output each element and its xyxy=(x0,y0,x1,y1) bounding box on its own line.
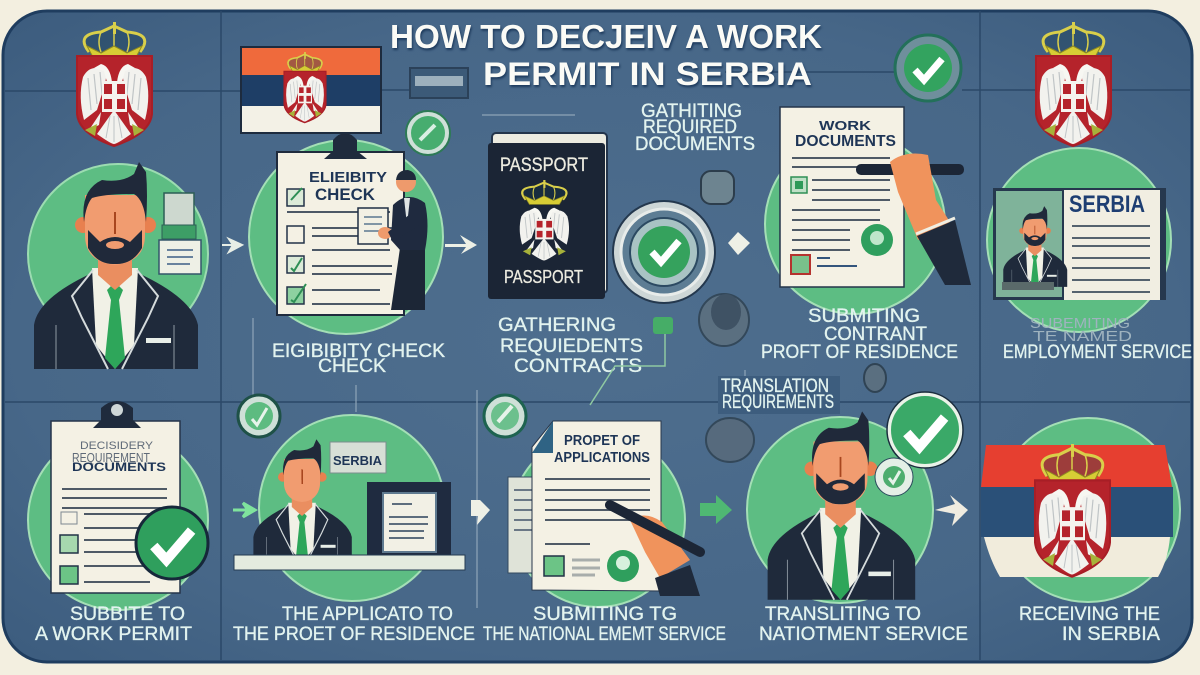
panel: step 1 applicant xyxy=(28,22,208,369)
sign xyxy=(330,442,386,473)
requirements heading: REQUIREMENTS xyxy=(722,392,834,413)
caption xyxy=(759,604,968,645)
panel: step 4 work documents xyxy=(761,35,971,363)
passport: PASSPORT xyxy=(504,267,583,287)
arrow xyxy=(700,495,732,524)
document xyxy=(780,107,904,287)
check badge xyxy=(484,395,526,437)
clipboard: DOCUMENTS xyxy=(72,460,166,474)
flag xyxy=(981,444,1173,577)
figure: applicant xyxy=(34,162,198,369)
figure: translator xyxy=(768,411,915,600)
caption xyxy=(233,604,475,645)
caption: SUBBITE TO xyxy=(70,604,185,625)
green circle xyxy=(996,418,1180,602)
check badge xyxy=(887,392,963,468)
caption: THE NATIONAL EMEMT SERVICE xyxy=(483,624,726,645)
passport: PASSPORT xyxy=(500,155,588,176)
green circle xyxy=(511,433,685,607)
requirements heading xyxy=(718,376,840,414)
check badge xyxy=(895,35,961,101)
green circle xyxy=(987,148,1171,332)
panel: step 5 employment service xyxy=(987,22,1192,363)
caption: A WORK PERMIT xyxy=(35,624,192,645)
panel: step 8 applications xyxy=(483,395,726,645)
id card: SERBIA xyxy=(1069,191,1145,218)
caption: SUBMITING TG xyxy=(533,604,677,625)
check badge xyxy=(406,111,450,155)
green circle xyxy=(259,415,445,601)
arrow xyxy=(445,235,477,254)
title xyxy=(390,18,822,92)
document xyxy=(508,421,661,591)
title: PERMIT IN SERBIA xyxy=(483,56,812,92)
green circle xyxy=(28,164,208,344)
arrow xyxy=(935,495,968,526)
clipboard: REQUIREMENT xyxy=(72,450,150,465)
caption xyxy=(498,315,643,377)
caption: SUBMITING xyxy=(808,306,920,327)
figure: small businessman xyxy=(358,170,428,310)
figure: clerk xyxy=(253,439,352,563)
caption: TE NAMED xyxy=(1033,328,1132,345)
panel: step 2 eligibility check xyxy=(241,47,468,377)
icon: coat of arms xyxy=(77,22,152,146)
green circle xyxy=(765,134,945,314)
caption: GATHERING xyxy=(498,315,616,336)
caption: CONTRACTS xyxy=(514,356,642,377)
panel: step 9 translation xyxy=(706,364,968,645)
caption xyxy=(761,306,958,363)
icon: hand with pen xyxy=(610,505,700,596)
title: HOW TO DECJEIV A WORK xyxy=(390,18,822,55)
caption: CHECK xyxy=(318,356,386,377)
document: DOCUMENTS xyxy=(795,133,896,150)
label plate xyxy=(410,68,468,98)
green circle xyxy=(747,417,933,603)
green circle xyxy=(249,140,443,334)
requirements heading: REQUIRED xyxy=(643,117,737,138)
icon: hand with pen xyxy=(856,154,971,285)
caption: PROFT OF RESIDENCE xyxy=(761,342,958,363)
caption xyxy=(1003,315,1192,363)
monitor xyxy=(367,482,451,556)
caption xyxy=(272,341,445,377)
requirements heading: TRANSLATION xyxy=(721,376,829,397)
arrow xyxy=(222,239,242,252)
requirements heading: GATHITING xyxy=(641,101,742,122)
stamp xyxy=(699,294,749,346)
requirements heading xyxy=(635,101,755,155)
caption: EIGIBIBITY CHECK xyxy=(272,341,445,362)
clipboard: CHECK xyxy=(315,185,376,204)
icon: printer xyxy=(159,193,201,274)
clipboard: DECISIDERY xyxy=(80,440,154,452)
passport xyxy=(488,133,607,299)
id card xyxy=(993,188,1166,300)
caption xyxy=(483,604,726,645)
check seal xyxy=(613,201,715,303)
flag xyxy=(241,47,381,133)
stamp xyxy=(706,418,754,462)
counter xyxy=(234,555,465,570)
caption: TRANSLITING TO xyxy=(765,604,921,625)
caption: CONTRANT xyxy=(824,324,927,345)
clipboard xyxy=(51,401,180,593)
requirements heading: DOCUMENTS xyxy=(635,134,755,155)
caption xyxy=(35,604,192,645)
clipboard: ELIEIBITY xyxy=(309,169,387,186)
arrow xyxy=(471,500,490,525)
document: APPLICATIONS xyxy=(554,449,650,466)
panel: step 7 counter xyxy=(233,395,475,645)
caption: REQUIEDENTS xyxy=(500,336,643,357)
caption: RECEIVING THE xyxy=(1019,604,1160,625)
document: WORK xyxy=(819,118,872,133)
panel: step 6 submit xyxy=(28,401,208,645)
stamp xyxy=(701,171,734,204)
connector xyxy=(590,317,673,405)
caption: SUBEMITING xyxy=(1030,315,1130,332)
arrow xyxy=(233,503,255,517)
green circle xyxy=(28,430,208,610)
stamp xyxy=(864,364,886,392)
caption xyxy=(1019,604,1160,645)
check badge xyxy=(136,507,208,579)
sign: SERBIA xyxy=(333,453,383,468)
check badge xyxy=(238,395,280,437)
arrow xyxy=(728,232,750,255)
caption: THE PROET OF RESIDENCE xyxy=(233,624,475,645)
document: PROPET OF xyxy=(564,432,640,449)
check badge small xyxy=(875,458,913,496)
clipboard xyxy=(277,133,404,315)
caption: NATIOTMENT SERVICE xyxy=(759,624,968,645)
panel: step 10 receiving xyxy=(981,418,1180,645)
panel: step 3 passport xyxy=(488,101,755,405)
caption: THE APPLICATO TO xyxy=(282,604,453,625)
caption: IN SERBIA xyxy=(1062,624,1160,645)
icon: coat of arms xyxy=(1036,22,1111,146)
